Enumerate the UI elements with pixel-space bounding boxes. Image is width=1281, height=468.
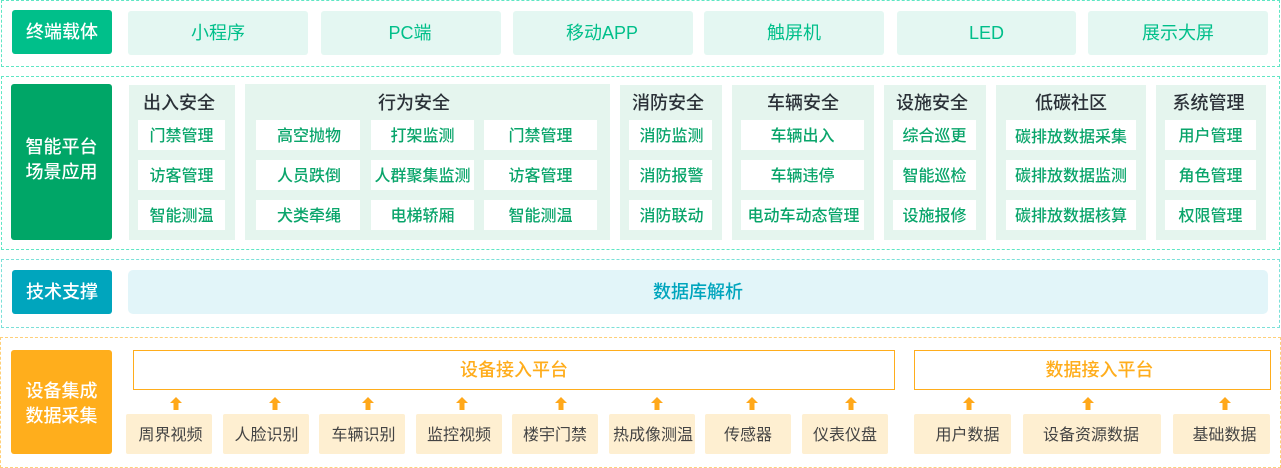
item: 综合巡更 (902, 128, 966, 145)
arrow (1219, 397, 1231, 410)
carrier: PC (321, 11, 501, 55)
item (741, 160, 864, 190)
carrier: mini program: 小程序 (191, 23, 245, 43)
item (256, 120, 360, 150)
item (138, 120, 225, 150)
source: face recognition (223, 414, 309, 454)
source: sensors (705, 414, 791, 454)
source: surveillance video: 监控视频 (427, 427, 491, 444)
item: 访客管理 (508, 168, 572, 185)
item: 打架监测 (390, 128, 454, 145)
item: 智能测温 (508, 208, 572, 225)
arrow (746, 397, 758, 410)
source: device resource data (1023, 414, 1161, 454)
carrier: LED: LED (969, 23, 1004, 43)
source: face recognition: 人脸识别 (234, 427, 298, 444)
item: 电梯轿厢 (390, 208, 454, 225)
source: vehicle recognition: 车辆识别 (331, 427, 396, 444)
label: smart platform scenarios: 智能平台 (26, 136, 98, 156)
item (893, 120, 976, 150)
carrier: touch screen (704, 11, 884, 55)
arrow (555, 397, 567, 410)
item (893, 200, 976, 230)
arrow (963, 397, 975, 410)
arrow (1082, 397, 1094, 410)
heading: low carbon community: 低碳社区 (1035, 93, 1107, 113)
label: technical support (12, 270, 112, 314)
item: 消防联动 (639, 208, 704, 225)
item: 设施报修 (902, 208, 966, 225)
item: 用户管理 (1178, 128, 1242, 145)
item (1006, 200, 1136, 230)
item (371, 200, 474, 230)
label: terminal carriers: 终端载体 (26, 22, 98, 42)
item: 车辆违停 (770, 168, 834, 185)
source: thermal imaging: 热成像测温 (613, 427, 693, 444)
heading: access security: 出入安全 (143, 93, 215, 113)
carrier: LED (897, 11, 1076, 55)
item (484, 160, 597, 190)
source: instruments (802, 414, 888, 454)
arrow (170, 397, 182, 410)
item: 碳排放数据核算 (1015, 208, 1127, 225)
item (484, 120, 597, 150)
label: device integration: 设备集成 (26, 381, 98, 401)
carrier: display wall (1088, 11, 1268, 55)
source: user data: 用户数据 (935, 427, 1000, 444)
item: 碳排放数据监测 (1015, 168, 1127, 185)
row: terminal carriers (1, 0, 1280, 67)
panel: system management (1156, 85, 1266, 240)
source: base data (1173, 414, 1270, 454)
item (371, 160, 474, 190)
item: 犬类牵绳 (277, 208, 341, 225)
platform: device access: 设备接入平台 (460, 360, 568, 380)
item (741, 200, 864, 230)
item (371, 120, 474, 150)
item (629, 120, 712, 150)
carrier: mobile app (513, 11, 693, 55)
heading: fire safety: 消防安全 (632, 93, 704, 113)
platform: device access (133, 350, 895, 390)
arrow (456, 397, 468, 410)
panel: access security (129, 85, 235, 240)
arrow (362, 397, 374, 410)
source: device resource data: 设备资源数据 (1043, 427, 1139, 444)
item: 智能测温 (149, 208, 214, 225)
arrow (845, 397, 857, 410)
bar: database parsing: 数据库解析 (653, 282, 743, 302)
item: 碳排放数据采集 (1015, 129, 1127, 146)
panel: behaviour security (245, 84, 610, 240)
label: technical support: 技术支撑 (26, 282, 98, 302)
item: 智能巡检 (902, 168, 966, 185)
panel: fire safety (620, 85, 722, 240)
item (741, 120, 864, 150)
source: instruments: 仪表仪盘 (813, 427, 877, 444)
source: perimeter video: 周界视频 (138, 427, 202, 444)
item (138, 200, 225, 230)
label: device integration: 数据采集 (26, 406, 98, 426)
item (1165, 120, 1256, 150)
item: 电动车动态管理 (747, 208, 860, 225)
item (1165, 160, 1256, 190)
item: 消防监测 (639, 128, 704, 145)
row: device integration (0, 337, 1281, 468)
item: 门禁管理 (149, 128, 214, 145)
item (1165, 200, 1256, 230)
platform: data access (914, 350, 1271, 390)
row: technical support (1, 259, 1280, 328)
panel: vehicle security (732, 85, 874, 240)
item (629, 160, 712, 190)
item: 高空抛物 (277, 128, 341, 145)
item: 角色管理 (1178, 168, 1242, 185)
carrier: mini program (128, 11, 308, 55)
source: base data: 基础数据 (1192, 427, 1256, 444)
item (1006, 160, 1136, 190)
item: 消防报警 (639, 168, 704, 185)
carrier: PC: PC端 (388, 23, 432, 43)
item (1006, 120, 1136, 150)
item (256, 160, 360, 190)
panel: facility security (884, 85, 986, 240)
panel: low carbon community (996, 85, 1146, 240)
heading: behaviour security: 行为安全 (378, 93, 450, 113)
item: 人员跌倒 (277, 168, 341, 185)
item (138, 160, 225, 190)
platform: data access: 数据接入平台 (1046, 360, 1154, 380)
arrow (269, 397, 281, 410)
item (256, 200, 360, 230)
source: vehicle recognition (319, 414, 405, 454)
label: terminal carriers (12, 10, 112, 54)
carrier: mobile app: 移动APP (566, 23, 638, 43)
label: smart platform scenarios: 场景应用 (26, 162, 98, 182)
item: 门禁管理 (508, 128, 572, 145)
item: 车辆出入 (770, 128, 834, 145)
carrier: display wall: 展示大屏 (1142, 23, 1214, 43)
item: 人群聚集监测 (374, 168, 470, 185)
item: 访客管理 (149, 168, 214, 185)
source: building access: 楼宇门禁 (523, 427, 587, 444)
source: building access (512, 414, 598, 454)
item: 权限管理 (1178, 208, 1242, 225)
source: thermal imaging (609, 414, 695, 454)
label: device integration (11, 350, 112, 454)
source: sensors: 传感器 (724, 427, 772, 444)
label: smart platform scenarios (11, 84, 112, 240)
source: perimeter video (126, 414, 212, 454)
source: surveillance video (416, 414, 502, 454)
heading: system management: 系统管理 (1172, 93, 1244, 113)
carrier: touch screen: 触屏机 (767, 23, 821, 43)
source: user data (914, 414, 1011, 454)
heading: facility security: 设施安全 (896, 93, 968, 113)
item (629, 200, 712, 230)
arrow (651, 397, 663, 410)
heading: vehicle security: 车辆安全 (767, 93, 839, 113)
bar: database parsing (128, 270, 1268, 314)
item (484, 200, 597, 230)
row: smart platform scenarios (1, 76, 1280, 250)
item (893, 160, 976, 190)
